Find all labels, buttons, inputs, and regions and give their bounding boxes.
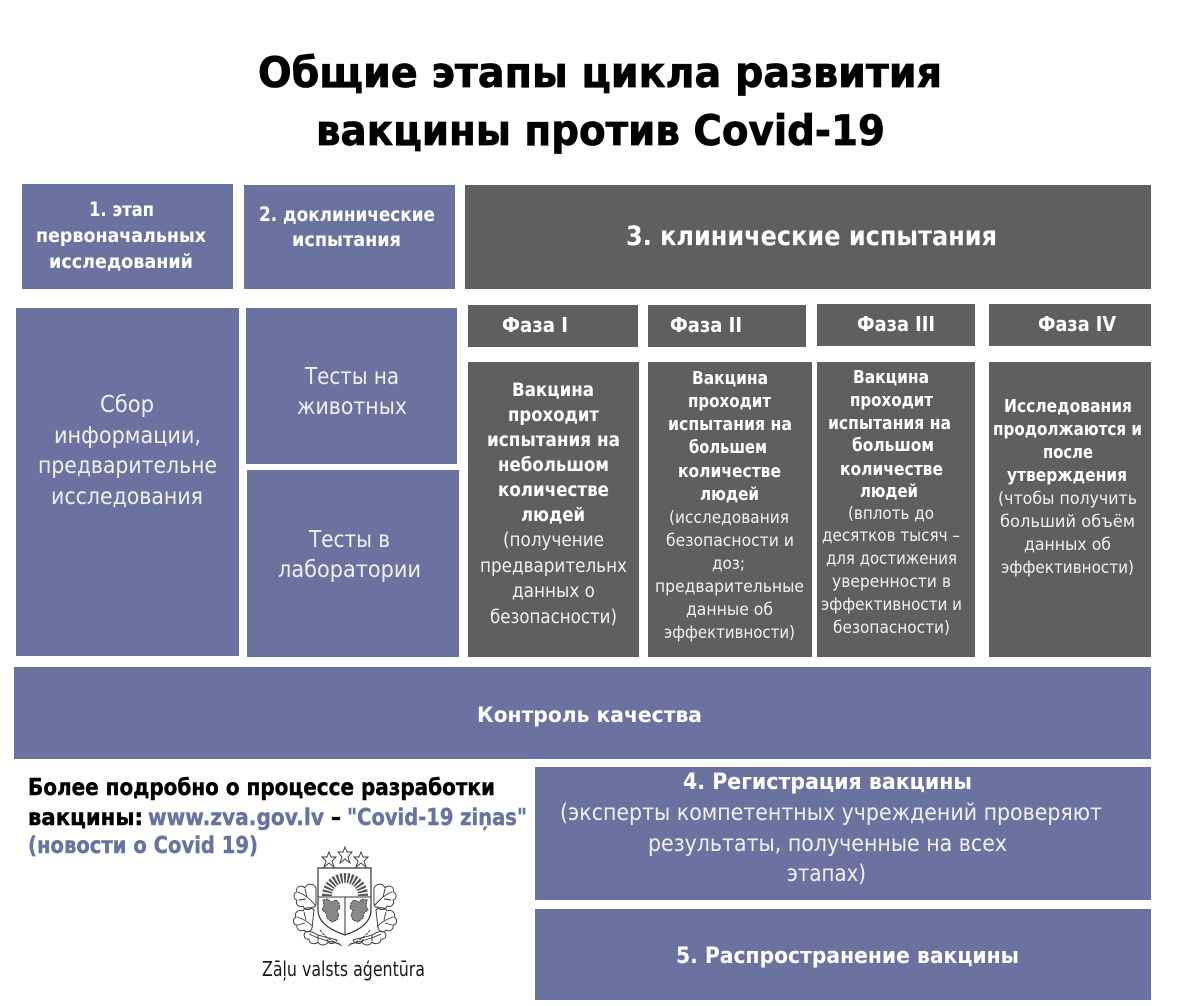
phase header: Phase III: Фаза III [857, 312, 935, 336]
panel: Phase IV description: продолжаются и [993, 420, 1142, 440]
agency name: Zāļu valsts aģentūra [262, 957, 425, 981]
title: Общие этапы цикла развития [258, 48, 942, 97]
phase header: Phase I [468, 305, 638, 347]
phase header: Phase III [817, 304, 975, 346]
text block: more information link: (новости о Covid 19) [28, 833, 258, 859]
panel: stage 4 vaccine registration: результаты, полученные на всех [648, 829, 1007, 857]
panel: stage 5 vaccine distribution: 5. Распространение вакцины [676, 943, 1019, 969]
panel: stage 2 header [244, 185, 455, 289]
panel: Phase I description: испытания на [487, 429, 620, 451]
panel: Phase II description: количестве [678, 462, 781, 482]
panel: Phase III description [817, 362, 975, 657]
panel: Phase III description: безопасности) [833, 618, 950, 638]
panel: Phase II description: проходит [688, 392, 772, 412]
panel: Phase IV description: данных об [1024, 535, 1111, 555]
panel: Phase III description: уверенности в [832, 572, 951, 592]
panel: Phase III description: для достижения [826, 549, 957, 569]
panel: Phase I description [468, 362, 639, 657]
phase header: Phase IV: Фаза IV [1038, 312, 1116, 336]
panel: Phase III description: десятков тысяч – [822, 526, 960, 546]
panel: Phase IV description: больший объём [1000, 512, 1135, 532]
panel: stage 3 header: 3. клинические испытания [626, 221, 997, 252]
panel: Phase I description: предварительнх [480, 556, 627, 577]
panel: stage 1 header [22, 184, 233, 289]
panel: Phase I description: небольшом [498, 454, 609, 476]
panel: Phase IV description: (чтобы получить [998, 489, 1137, 509]
title: вакцины против Covid-19 [316, 106, 885, 155]
panel: quality control [14, 667, 1151, 759]
panel: Phase I description: количестве [498, 479, 609, 501]
panel: stage 4 vaccine registration: (эксперты компетентных учреждений проверяют [560, 798, 1102, 826]
phase header: Phase IV [989, 304, 1151, 346]
panel: Phase II description [648, 362, 812, 657]
panel: stage 4 vaccine registration: 4. Регистрация вакцины [683, 769, 972, 795]
panel: animal tests [246, 308, 457, 464]
text block: more information link: Более подробно о процессе разработки [28, 775, 495, 801]
panel: Phase I description: Вакцина [512, 379, 594, 401]
panel: Phase III description: Вакцина [853, 368, 929, 388]
panel: stage 1 header: исследований [49, 250, 193, 273]
panel: Phase III description: людей [860, 482, 918, 502]
title [258, 48, 942, 155]
text block: more information link [28, 775, 527, 859]
panel: Phase II description: предварительные [655, 577, 804, 597]
panel: stage 5 vaccine distribution [535, 909, 1151, 1000]
panel: Phase IV description: после [1043, 443, 1093, 463]
phase header: Phase II: Фаза II [670, 313, 742, 337]
panel: information gathering: Сбор [100, 390, 154, 418]
panel: information gathering: предварительне [38, 451, 217, 479]
panel: stage 4 vaccine registration: этапах) [787, 859, 866, 887]
panel: laboratory tests: Тесты в [308, 525, 390, 553]
panel: Phase II description: людей [700, 485, 759, 505]
panel: Phase II description: испытания на [668, 415, 792, 435]
panel: Phase III description: (вплоть до [848, 504, 934, 524]
panel: Phase II description: (исследования [669, 508, 789, 528]
panel: stage 1 header: 1. этап [89, 198, 154, 221]
panel: Phase I description: проходит [508, 404, 599, 426]
panel: Phase II description: большем [689, 438, 767, 458]
panel: Phase III description: большом [852, 436, 934, 456]
panel: Phase III description: эффективности и [821, 595, 962, 615]
panel: Phase II description: безопасности и [666, 531, 794, 551]
panel: Phase IV description: Исследования [1004, 397, 1132, 417]
phase header: Phase II [648, 305, 806, 347]
phase header: Phase I: Фаза I [502, 313, 568, 337]
panel: Phase I description: (получение [503, 530, 604, 551]
panel: stage 2 header: 2. доклинические [259, 203, 435, 226]
panel: stage 4 vaccine registration [535, 767, 1151, 900]
text block: more information link: www.zva.gov.lv [148, 805, 324, 831]
panel: stage 2 header: испытания [292, 228, 401, 251]
panel: Phase II description: Вакцина [692, 369, 768, 389]
panel: animal tests: Тесты на [304, 362, 399, 390]
panel: stage 3 header [465, 185, 1151, 289]
panel: Phase II description: данные об [686, 600, 773, 620]
text block: more information link: – [331, 805, 341, 831]
text block: more information link: вакцины: [28, 805, 143, 831]
panel: quality control: Контроль качества [477, 703, 702, 728]
panel: information gathering: информации, [54, 421, 201, 449]
panel: Phase II description: доз; [712, 554, 745, 574]
panel: Phase III description: проходит [850, 391, 934, 411]
panel: Phase IV description: утверждения [1007, 466, 1127, 486]
panel: laboratory tests [247, 470, 459, 657]
panel: stage 1 header: первоначальных [36, 224, 206, 247]
panel: Phase IV description [989, 362, 1151, 657]
panel: Phase III description: испытания на [828, 414, 951, 434]
panel: laboratory tests: лаборатории [278, 555, 421, 583]
panel: Phase I description: данных о [512, 581, 595, 602]
text block: more information link: "Covid-19 ziņas" [347, 805, 527, 831]
panel: Phase III description: количестве [840, 460, 943, 480]
panel: information gathering: исследования [51, 482, 203, 510]
icon: coat of arms of Latvia [293, 847, 397, 946]
panel: Phase II description: эффективности) [664, 623, 795, 643]
panel: information gathering [16, 308, 239, 656]
panel: Phase I description: людей [521, 504, 585, 526]
panel: Phase I description: безопасности) [490, 607, 617, 628]
panel: animal tests: животных [297, 392, 407, 420]
panel: Phase IV description: эффективности) [1001, 558, 1134, 578]
